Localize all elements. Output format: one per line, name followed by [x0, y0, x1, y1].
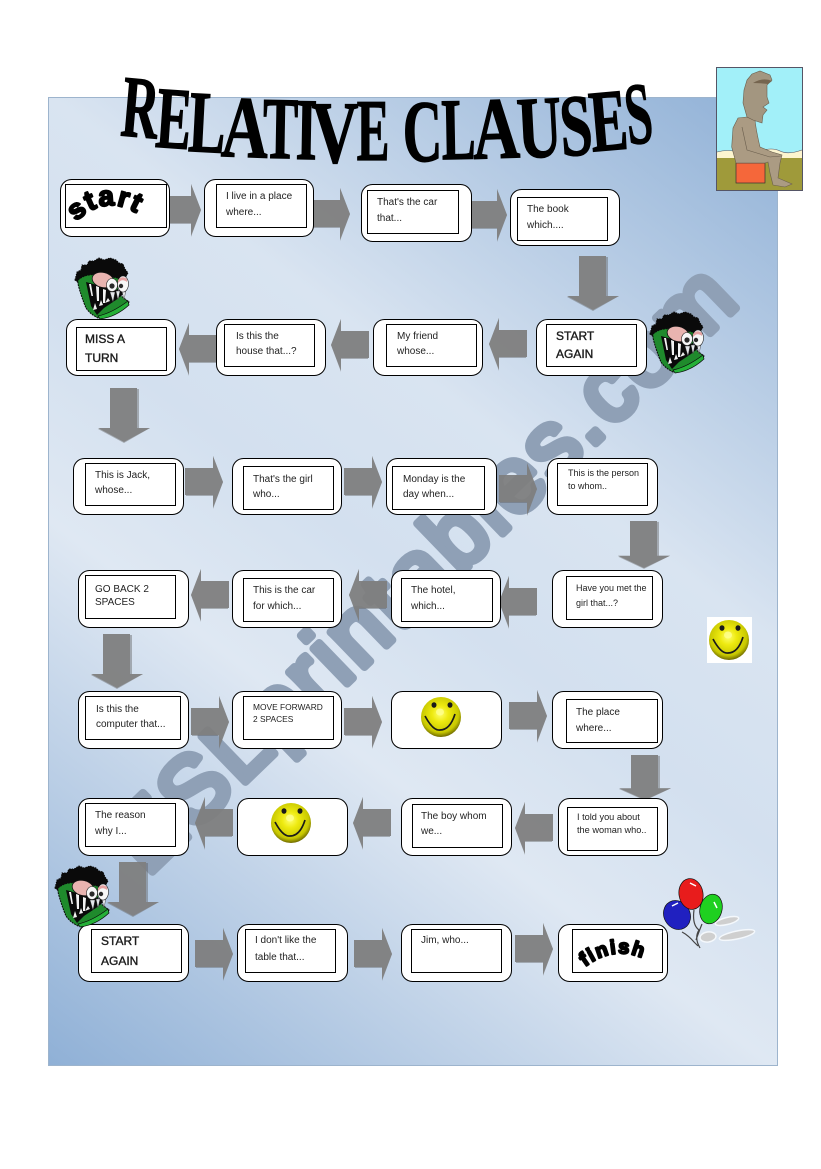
square: The book which: The book [527, 204, 570, 215]
arrow: row 7 first [195, 928, 233, 981]
square: Is this the house that: house that...? [236, 346, 297, 357]
title: E [153, 68, 195, 169]
title: E [585, 70, 631, 171]
square: The place where [552, 692, 662, 748]
square: Have you met the girl that: Have you met the [576, 583, 647, 593]
arrow: down to row 4 [618, 521, 670, 569]
icon: monster near start again [650, 312, 704, 373]
title: S [557, 77, 596, 176]
icon: monster near bottom start again [55, 866, 109, 927]
square: That's the girl who: That's the girl [253, 474, 313, 485]
square: Monday is the day when: day when... [403, 489, 454, 500]
square: I don't like the table that [238, 924, 348, 982]
square: This is Jack, whose: whose... [94, 485, 132, 496]
square: Go back 2 spaces: SPACES [95, 597, 135, 608]
square: start [60, 179, 170, 237]
arrow: row 5 second [344, 696, 382, 749]
square: Have you met the girl that [552, 570, 662, 628]
title: T [262, 79, 299, 178]
square: This is the person to whom [548, 458, 658, 514]
arrow: down to row 7 [107, 862, 159, 917]
square: The hotel, which: which... [410, 601, 445, 612]
square: Miss a turn [66, 320, 176, 376]
square: Miss a turn: MISS A [85, 332, 125, 346]
arrow: row 2 third [489, 318, 527, 371]
square: That's the car that: That's the car [377, 197, 438, 208]
title: I [295, 81, 318, 178]
arrow: row 2 first [179, 323, 217, 376]
arrow: row 4 second [349, 569, 387, 622]
square: Monday is the day when: Monday is the [403, 474, 466, 485]
square: My friend whose: My friend [397, 331, 438, 342]
square: smiley bonus row 6 [238, 798, 348, 856]
icon: moai picture [716, 68, 802, 190]
square: This is the car for which: for which... [253, 601, 301, 612]
arrow: row 6 second [353, 797, 391, 850]
square: This is the car for which: This is the car [253, 585, 316, 596]
arrow: down to row 6 [619, 755, 671, 801]
square: This is the car for which [232, 570, 342, 628]
square: This is Jack, whose: This is Jack, [95, 470, 150, 481]
square: finish [558, 924, 668, 982]
square: Jim, who: Jim, who... [421, 935, 469, 946]
square: The hotel, which [392, 570, 500, 628]
square: I don't like the table that: I don't like the [255, 935, 317, 946]
square: This is the person to whom: to whom.. [568, 481, 607, 491]
square: Is this the house that: Is this the [236, 331, 279, 342]
square: The boy whom we [402, 798, 512, 856]
icon: balloons [658, 877, 755, 948]
square: I told you about the woman who: I told you about [577, 812, 640, 822]
square: smiley bonus [392, 692, 502, 748]
title: R [118, 57, 164, 158]
square: This is the person to whom: This is the person [568, 468, 639, 478]
arrow: row 1 [163, 184, 201, 237]
square: Start again: START [556, 329, 595, 343]
title: U [515, 78, 564, 178]
square: I told you about the woman who [558, 798, 668, 856]
arrow: down to row 2 [567, 256, 619, 311]
title: L [187, 72, 229, 172]
square: The reason why I: The reason [95, 810, 146, 821]
arrow: row 3 second [344, 456, 382, 509]
square: Start again row 7 [78, 924, 188, 982]
title: S [619, 65, 658, 164]
arrow: row 6 third [515, 802, 553, 855]
arrow: row 4 first [191, 569, 229, 622]
arrows [91, 184, 671, 981]
square: The book which [510, 190, 620, 246]
square: That's the girl who [232, 458, 342, 514]
background panel [48, 98, 778, 1066]
square: This is Jack, whose [74, 458, 184, 514]
watermark: ESLprintables.com [90, 245, 754, 891]
square: Go back 2 spaces [78, 570, 188, 628]
title: V [311, 84, 359, 181]
square: My friend whose: whose... [396, 346, 434, 357]
square: The book which: which.... [526, 220, 564, 231]
arrow: row 1 second [312, 188, 350, 241]
square: Monday is the day when [386, 458, 496, 514]
title: A [220, 78, 270, 177]
arrow: row 5 third [509, 690, 547, 743]
square: The boy whom we: we... [420, 826, 442, 837]
square: The place where: where... [575, 723, 612, 734]
arrow: down to row 3 [98, 388, 150, 443]
square: Is this the computer that: computer that... [96, 719, 165, 730]
square: Start again: AGAIN [556, 347, 593, 361]
icon: smiley [271, 803, 311, 843]
square: Is this the computer that: Is this the [96, 704, 139, 715]
square: Start again [536, 320, 646, 376]
square: My friend whose [374, 320, 482, 376]
square: The boy whom we: The boy whom [421, 811, 487, 822]
square: Move forward 2 spaces [232, 692, 342, 748]
square: Jim, who [402, 924, 512, 982]
square: That's the car that [362, 184, 472, 242]
title: E [357, 82, 389, 180]
arrow: row 3 first [185, 456, 223, 509]
arrow: row 2 second [331, 319, 369, 372]
square: Go back 2 spaces: GO BACK 2 [95, 584, 149, 595]
square: Is this the house that [216, 320, 326, 376]
title [118, 57, 658, 181]
square: Have you met the girl that: girl that...? [576, 598, 618, 608]
arrow: row 1 third [469, 189, 507, 242]
arrow: down to row 5 [91, 634, 143, 689]
title: C [402, 83, 443, 181]
arrow: row 6 first [195, 797, 233, 850]
square: Is this the computer that [78, 692, 188, 748]
arrow: row 4 third [499, 576, 537, 629]
square: I told you about the woman who: the woman who.. [577, 825, 646, 835]
title: A [471, 79, 521, 178]
square: finish: finish [578, 938, 644, 967]
square: Move forward 2 spaces: MOVE FORWARD [253, 702, 323, 712]
square: The reason why I: why I... [94, 826, 127, 837]
square: I live in a place where [204, 180, 314, 236]
square: I live in a place where: where... [225, 207, 262, 218]
square: The place where: The place [576, 707, 620, 718]
icon: smiley [421, 697, 461, 737]
arrow: row 5 first [191, 696, 229, 749]
square: I don't like the table that: table that... [255, 952, 304, 963]
title: L [441, 80, 476, 179]
square: Move forward 2 spaces: 2 SPACES [253, 714, 294, 724]
square: That's the car that: that... [377, 213, 402, 224]
icon: smiley on white tile [707, 617, 752, 663]
square: Start again row 7: START [101, 934, 140, 948]
arrow: row 3 third [499, 463, 537, 516]
arrow: row 7 second [354, 928, 392, 981]
square: The hotel, which: The hotel, [411, 585, 455, 596]
square: That's the girl who: who... [252, 489, 280, 500]
arrow: row 7 third [515, 923, 553, 976]
square: I live in a place where: I live in a place [226, 191, 293, 202]
square: start: start [68, 190, 144, 220]
square: Miss a turn: TURN [85, 351, 118, 365]
square: Start again row 7: AGAIN [101, 954, 138, 968]
icon: monster near miss a turn [75, 258, 129, 319]
square: The reason why I [78, 798, 188, 856]
